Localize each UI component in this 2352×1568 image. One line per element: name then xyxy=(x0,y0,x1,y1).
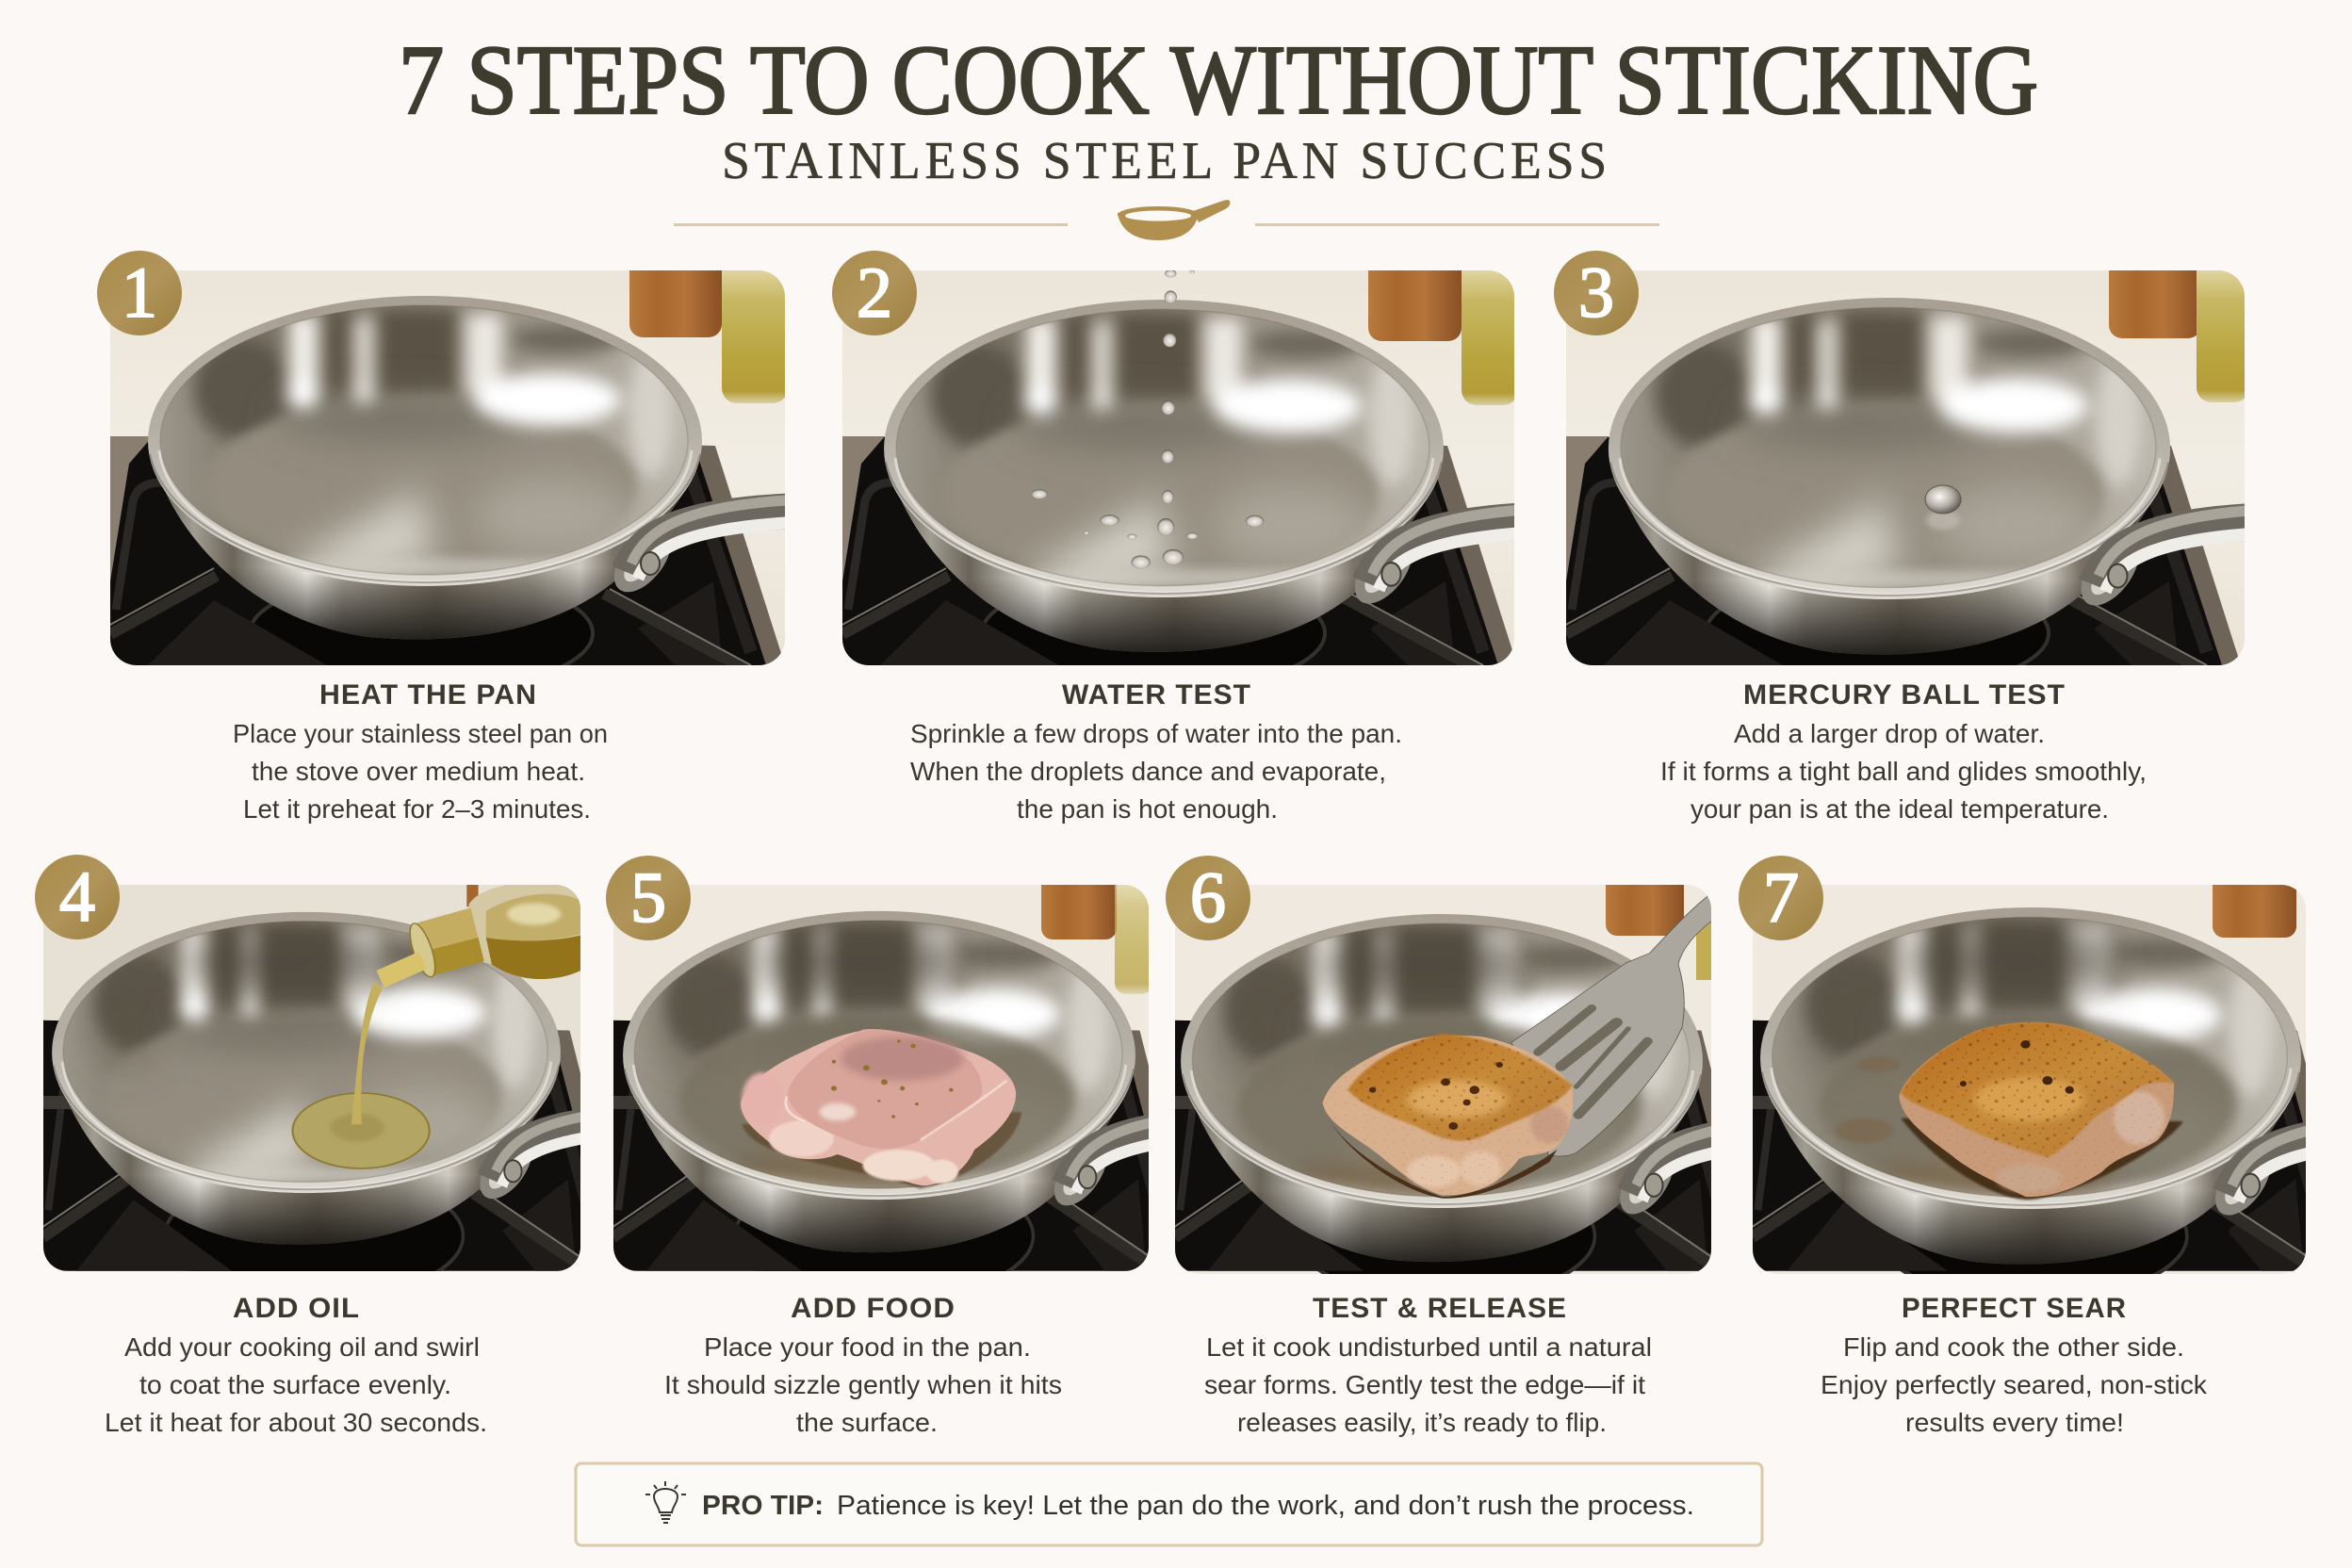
icon: gold pan divider xyxy=(1118,200,1230,240)
badge 2 xyxy=(832,251,917,335)
body 5: It should sizzle gently when it hits xyxy=(664,1370,1062,1399)
panel: step 5 add food xyxy=(606,856,1149,1432)
panel: step 3 mercury ball test xyxy=(1554,251,2272,824)
body 2: When the droplets dance and evaporate, xyxy=(910,757,1386,786)
body 3: If it forms a tight ball and glides smoothly, xyxy=(1660,757,2147,786)
body 5: Place your food in the pan. xyxy=(704,1332,1031,1362)
body 7: results every time! xyxy=(1905,1408,2124,1437)
body 2: the pan is hot enough. xyxy=(1017,794,1278,824)
badge 3 xyxy=(1554,251,1639,335)
body 1: Let it preheat for 2–3 minutes. xyxy=(243,794,591,824)
photo: mercury ball xyxy=(1566,270,2245,665)
title: 7 STEPS TO COOK WITHOUT STICKING xyxy=(399,24,2038,135)
panel: step 6 test and release xyxy=(1166,856,1711,1437)
icon: light bulb xyxy=(645,1481,686,1523)
body 4: to coat the surface evenly. xyxy=(139,1370,451,1399)
subtitle: STAINLESS STEEL PAN SUCCESS xyxy=(722,132,1611,190)
photo: pouring oil xyxy=(43,885,580,1271)
body 4 xyxy=(105,1332,487,1437)
photo: perfectly seared chicken xyxy=(1753,885,2306,1274)
photo: spatula lifting seared chicken xyxy=(1175,885,1711,1274)
badge 7 xyxy=(1739,856,1823,940)
body 7: Enjoy perfectly seared, non-stick xyxy=(1821,1370,2208,1399)
body 3: Add a larger drop of water. xyxy=(1734,719,2045,748)
badge 4: 4 xyxy=(59,858,95,937)
panel: step 1 heat the pan xyxy=(97,251,802,824)
heading 1: HEAT THE PAN xyxy=(319,679,537,710)
pro tip text: Patience is key! Let the pan do the work, and don’t rush the process. xyxy=(837,1491,1694,1521)
badge 3: 3 xyxy=(1578,253,1614,333)
panel: step 4 add oil xyxy=(35,855,580,1432)
body 3: your pan is at the ideal temperature. xyxy=(1690,794,2109,824)
badge 1: 1 xyxy=(122,253,157,333)
badge 5 xyxy=(606,856,691,940)
heading 4: ADD OIL xyxy=(233,1293,360,1324)
badge 5: 5 xyxy=(630,858,666,938)
body 6: Let it cook undisturbed until a natural xyxy=(1206,1332,1652,1362)
heading 2: WATER TEST xyxy=(1062,679,1251,710)
body 1: Place your stainless steel pan on xyxy=(233,719,608,748)
badge 6 xyxy=(1166,856,1250,940)
panel: step 7 perfect sear xyxy=(1739,856,2352,1437)
body 5 xyxy=(664,1332,1062,1437)
body 1 xyxy=(233,719,608,824)
photo: water droplets xyxy=(842,270,1514,665)
heading 3: MERCURY BALL TEST xyxy=(1743,679,2066,710)
photo: pan on stove xyxy=(110,270,785,665)
body 4: Add your cooking oil and swirl xyxy=(124,1332,480,1362)
callout: pro tip xyxy=(576,1463,1762,1545)
body 7: Flip and cook the other side. xyxy=(1843,1332,2184,1362)
badge 4 xyxy=(35,855,120,939)
body 7 xyxy=(1821,1332,2208,1437)
body 3 xyxy=(1660,719,2147,824)
badge 6: 6 xyxy=(1190,858,1226,938)
pro tip label: PRO TIP: xyxy=(702,1491,824,1521)
heading 5: ADD FOOD xyxy=(791,1293,956,1324)
badge 1 xyxy=(97,251,182,335)
body 2 xyxy=(910,719,1402,824)
body 6 xyxy=(1204,1332,1652,1437)
heading 7: PERFECT SEAR xyxy=(1902,1293,2127,1324)
body 2: Sprinkle a few drops of water into the pan. xyxy=(910,719,1402,748)
badge 7: 7 xyxy=(1763,858,1799,938)
heading 6: TEST & RELEASE xyxy=(1313,1293,1567,1324)
body 6: releases easily, it’s ready to flip. xyxy=(1237,1408,1607,1437)
panel: step 2 water test xyxy=(832,251,1544,824)
body 4: Let it heat for about 30 seconds. xyxy=(105,1408,487,1437)
badge 2: 2 xyxy=(857,253,892,333)
photo: raw chicken in pan xyxy=(613,885,1149,1271)
body 6: sear forms. Gently test the edge—if it xyxy=(1204,1370,1645,1399)
body 5: the surface. xyxy=(796,1408,938,1437)
body 1: the stove over medium heat. xyxy=(252,757,585,786)
